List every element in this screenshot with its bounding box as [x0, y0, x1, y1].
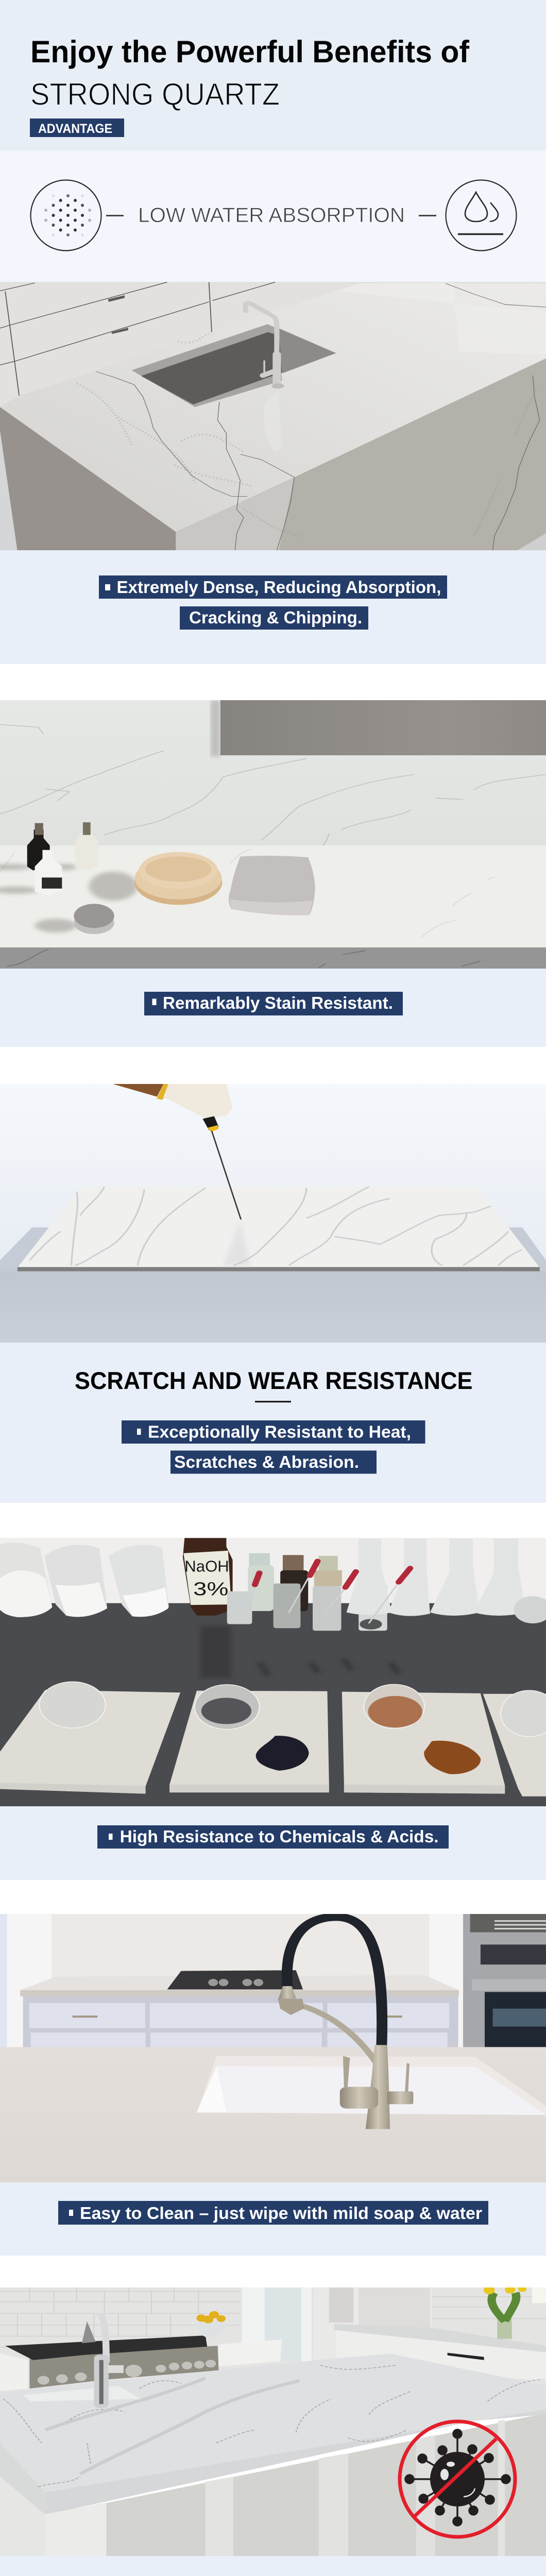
caption panel 4: [0, 1806, 546, 1880]
photo: kitchen island with sink: [0, 278, 546, 552]
photo: scratch test: [0, 1081, 546, 1344]
advantage badge: ADVANTAGE: [38, 122, 112, 136]
tin: [74, 920, 114, 934]
header panel: [0, 0, 546, 150]
right cabinets: [334, 2324, 546, 2353]
lower cabinets: [23, 1996, 458, 2047]
petri dishes: [39, 1682, 106, 1728]
island base: [0, 2477, 45, 2557]
lemons bowl: [196, 2311, 226, 2337]
photo: chemical test: [0, 1536, 546, 1808]
marble veins wall: [0, 724, 546, 851]
icon: porous surface: [31, 180, 101, 250]
stains: [256, 1736, 309, 1771]
mirror: [211, 700, 220, 757]
caption line 2: Cracking & Chipping.: [189, 608, 362, 627]
reflections: [200, 1625, 399, 1678]
caption line 1: [122, 1420, 425, 1444]
section heading: SCRATCH AND WEAR RESISTANCE: [75, 1367, 473, 1394]
caption panel 2: [0, 969, 546, 1047]
sink reflection: [23, 2386, 141, 2401]
photo: vanity counter: [0, 698, 546, 970]
dash right: [419, 215, 436, 216]
countertop: [0, 2047, 546, 2183]
veins: [96, 283, 546, 550]
range: [29, 2346, 219, 2388]
oven: [463, 1914, 546, 2048]
wooden tray: [134, 879, 223, 905]
faucet: [278, 1917, 413, 2129]
panel: low water absorption: [0, 150, 546, 282]
flasks: [347, 1539, 546, 1623]
caption: High Resistance to Chemicals & Acids.: [120, 1827, 439, 1846]
caption panel 5: [0, 2182, 546, 2256]
cabinet lines: [0, 282, 275, 396]
flowers: [484, 2286, 546, 2339]
island countertop: [0, 2353, 546, 2492]
caption line 1: Exceptionally Resistant to Heat,: [148, 1422, 411, 1442]
plinth: [0, 1227, 546, 1274]
pipettes: [252, 1561, 410, 1623]
caption: Easy to Clean – just wipe with mild soap & water: [80, 2204, 482, 2223]
feature label: LOW WATER ABSORPTION: [138, 204, 405, 227]
doorway: [242, 2287, 312, 2361]
advantage badge: [30, 118, 124, 137]
hand with glove: [111, 1083, 164, 1098]
countertop: [0, 283, 546, 532]
faucet: [246, 303, 277, 385]
dash left: [106, 215, 124, 216]
caption panel 1: [0, 550, 546, 664]
caption line 1: Extremely Dense, Reducing Absorption,: [116, 578, 441, 597]
bacterium: [405, 2430, 510, 2526]
icon: water drop: [446, 180, 516, 250]
bottles: [27, 829, 50, 870]
sink: [132, 324, 336, 407]
screwdriver: [202, 1116, 241, 1219]
sample tiles: [0, 1690, 546, 1797]
brown bottle: [183, 1538, 233, 1616]
glass jars: [227, 1553, 387, 1631]
title: Enjoy the Powerful Benefits of: [30, 35, 470, 69]
beakers: [0, 1543, 169, 1617]
caption panel 6: [0, 2556, 546, 2576]
prohibition ring: [400, 2421, 515, 2537]
counter: [0, 845, 546, 948]
photo: chemical test: 3%: [193, 1579, 229, 1599]
shadows: [0, 864, 138, 933]
chrome faucet: [82, 2315, 124, 2408]
front faces: [176, 359, 546, 552]
photo: kitchen faucet: [0, 1911, 546, 2183]
photo: chemical test: NaOH: [184, 1557, 229, 1575]
photo: marble kitchen with antibacterial sign: [0, 2285, 546, 2557]
slab: [18, 1187, 540, 1267]
cooktop: [167, 1970, 303, 1989]
towel: [229, 856, 315, 916]
subtitle: STRONG QUARTZ: [30, 77, 280, 111]
subway tile: [0, 2287, 546, 2347]
back counter: [21, 1977, 458, 1990]
caption line 2: Scratches & Abrasion.: [174, 1452, 359, 1471]
caption: Remarkably Stain Resistant.: [163, 993, 393, 1012]
caption panel 3: [0, 1343, 546, 1503]
icon: no bacteria sign: [400, 2421, 515, 2537]
marble veins: [4, 2365, 543, 2487]
left side: [0, 407, 176, 552]
